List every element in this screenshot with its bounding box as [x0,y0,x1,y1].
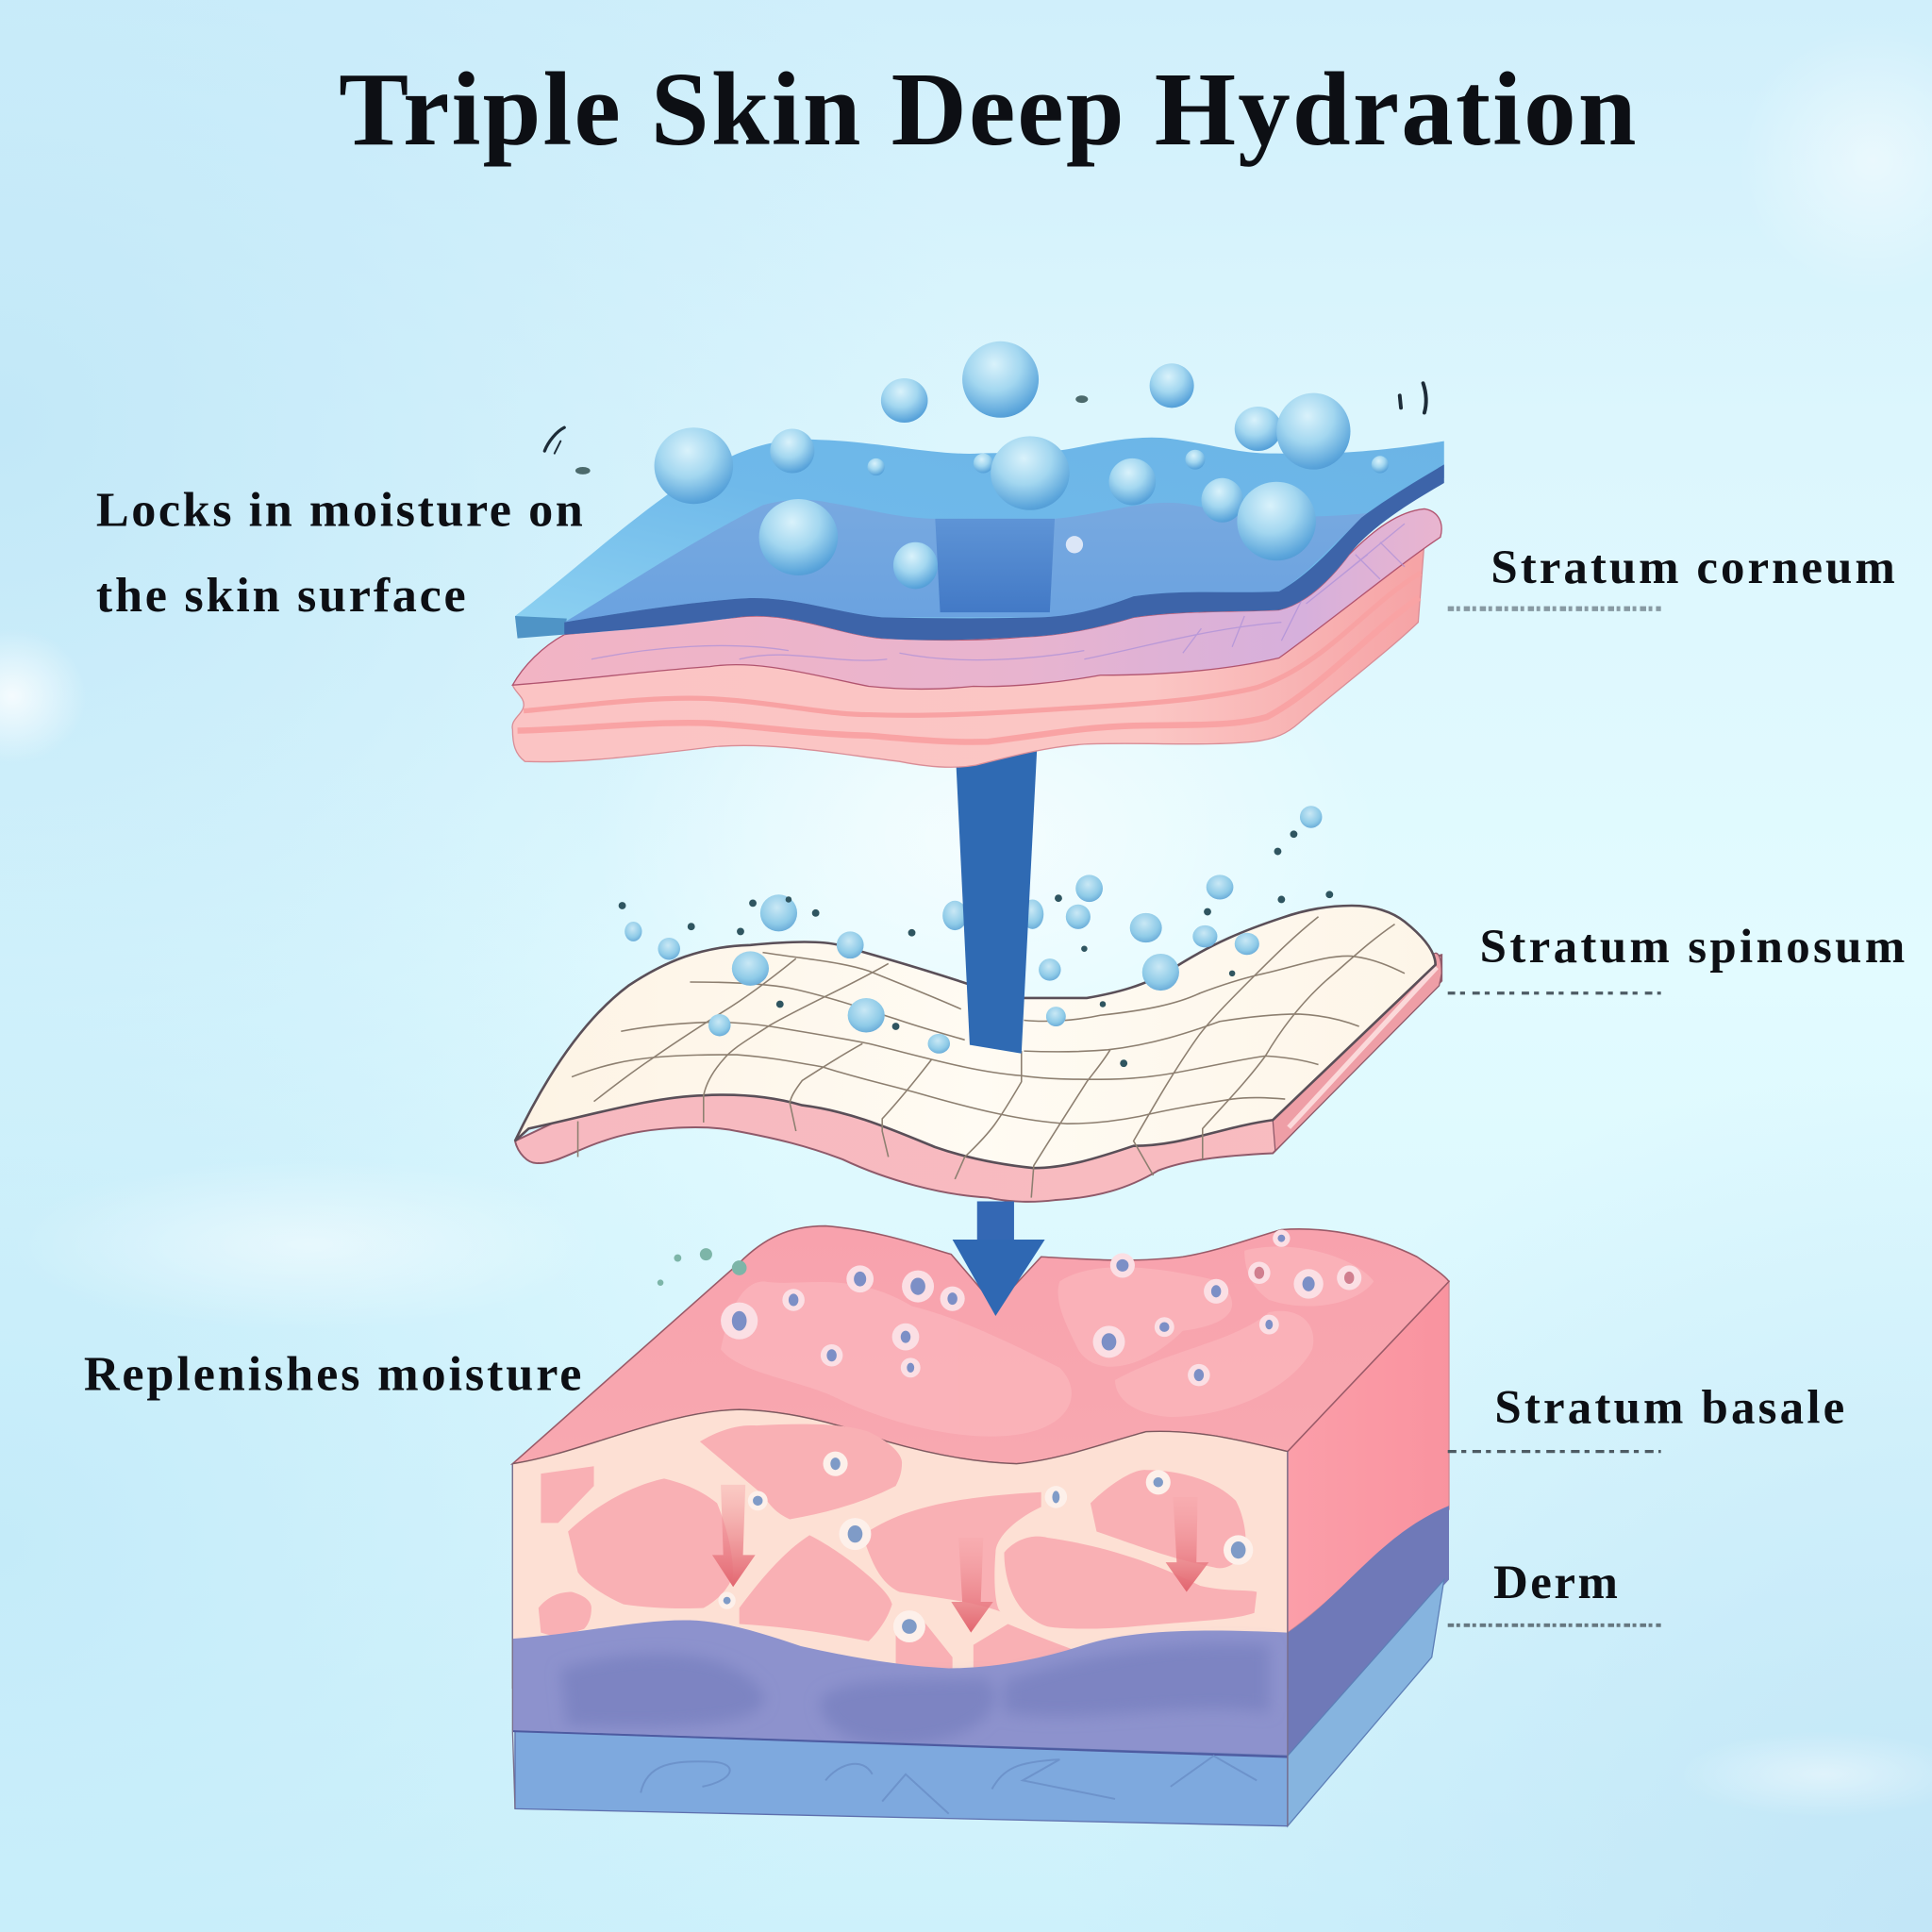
pink stripes [524,573,1421,715]
front tissue cells [539,1424,1257,1675]
pink top surface [512,508,1441,689]
dark particles [619,830,1333,1067]
sheet grid lines [572,917,1405,1198]
moisture particles [625,806,1322,1036]
splash marks [544,383,1426,475]
label: locks in moisture [96,483,583,623]
block right side blue face [1288,1579,1444,1826]
dark water band [564,464,1444,640]
pale pink lower body [512,542,1424,767]
label: derm: Derm [1493,1557,1618,1609]
arrow: long blue arrow shaft from top layer to middle layer [955,740,1038,1054]
blue band faint relief lines [641,1756,1257,1814]
arrow: blue arrowhead into bottom block [953,1240,1045,1316]
front blue band [515,1731,1288,1826]
red downward arrows [712,1485,1208,1633]
front purple band [512,1620,1288,1759]
label: locks in moisture: the skin surface [96,568,466,623]
green particles at block corner [658,1248,747,1286]
panel: stratum corneum layer [512,341,1444,767]
pink surface texture [591,524,1405,660]
purple band darker blobs [560,1643,1269,1745]
arrow: short blue shaft between middle and bottom layers [977,1201,1014,1244]
water column centre block [935,519,1055,612]
water film light layer [515,438,1444,640]
label: stratum basale: Stratum basale [1494,1382,1844,1435]
water droplets [655,341,1389,589]
cell nuclei [718,1452,1253,1642]
water film mid region [564,500,1372,623]
sheet right edge [1273,953,1441,1151]
surface cells [721,1230,1361,1386]
sheet side and front thickness [515,955,1441,1202]
panel: stratum spinosum layer [515,806,1441,1202]
block front tissue background [512,1409,1288,1688]
surface tissue lumps [721,1247,1374,1437]
block right side purple face [1288,1506,1449,1756]
front edge line [512,1452,1288,1826]
block top surface [512,1226,1449,1464]
icon: droplet at arrow tip [928,1034,950,1054]
label: stratum corneum: Stratum corneum [1491,541,1895,594]
block right side pink face [1288,1281,1449,1633]
label: replenishes moisture: Replenishes moisture [84,1346,581,1401]
title: Triple Skin Deep Hydration [339,52,1637,168]
label: locks in moisture: Locks in moisture on [96,483,583,538]
label: stratum spinosum: Stratum spinosum [1480,921,1905,974]
panel: stratum basale and dermis block [512,1201,1449,1826]
sheet top surface [515,906,1436,1168]
water film left edge [515,616,567,639]
